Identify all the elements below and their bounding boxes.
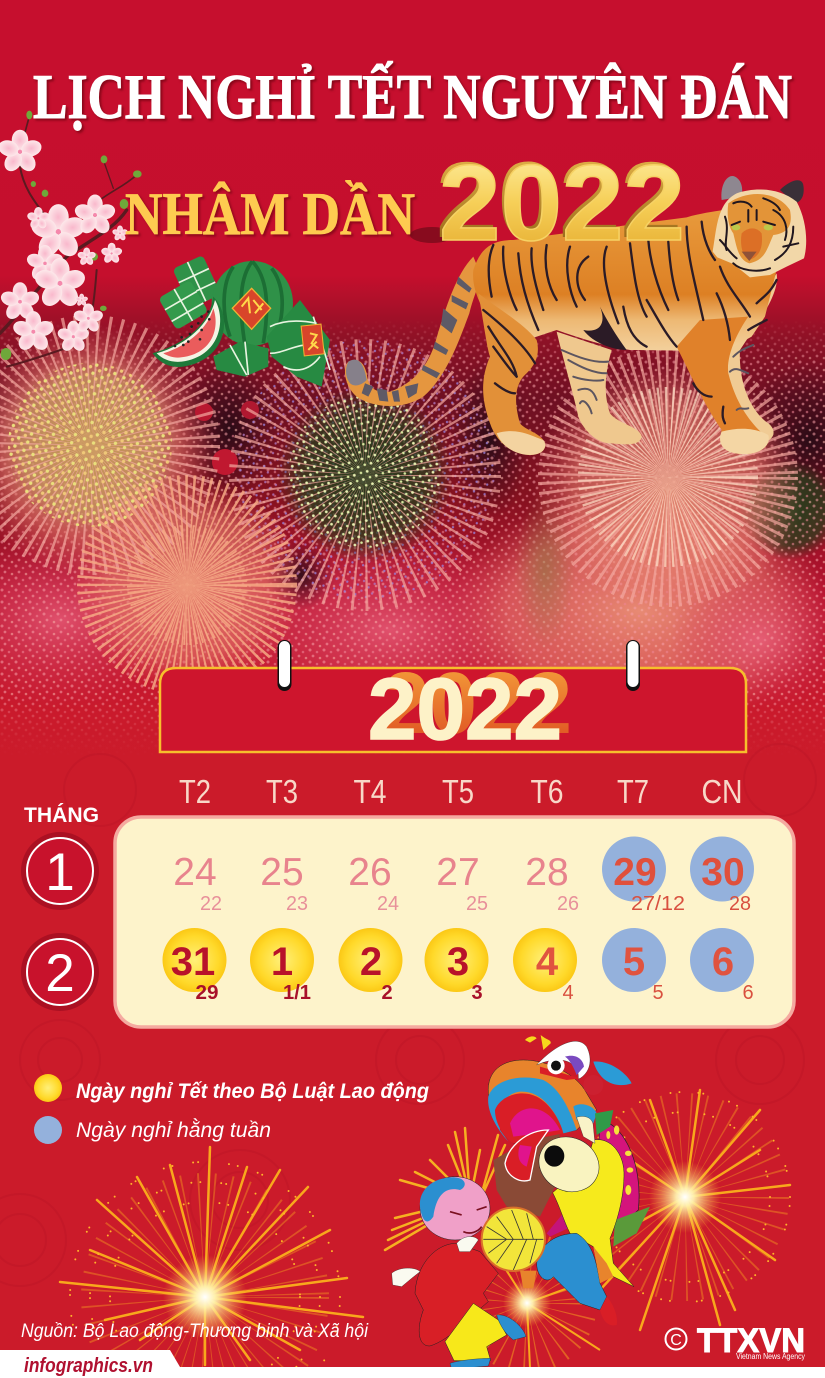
February lunar dates: 6 xyxy=(742,982,754,1004)
January dates row xyxy=(173,851,745,894)
January dates row: 30 xyxy=(701,851,745,894)
tiger head xyxy=(713,176,806,277)
illustration: peach blossom branch xyxy=(0,111,142,367)
heading: gold 2022: 2022 xyxy=(436,139,682,260)
February dates row xyxy=(171,940,734,984)
weekday headers: T6 xyxy=(530,773,564,810)
month badge 2 xyxy=(21,933,99,1011)
January dates row: 25 xyxy=(260,851,304,894)
weekday headers: T2 xyxy=(179,773,211,810)
tiger stripes xyxy=(483,222,777,423)
January dates row: 29 xyxy=(613,851,657,894)
heading: Nham Dan: NHÂM DẦN xyxy=(125,181,415,247)
legend: Tet holiday: Ngày nghỉ Tết theo Bộ Luật Lao động xyxy=(76,1080,429,1103)
tiger leg stripes xyxy=(562,345,753,413)
January lunar dates: 26 xyxy=(557,893,579,915)
January lunar dates: 22 xyxy=(200,893,222,915)
lion body scales xyxy=(547,1120,650,1247)
January dates row: 24 xyxy=(173,851,217,894)
February dates row: 2 xyxy=(360,940,382,984)
weekday headers xyxy=(179,773,742,810)
illustration: lion dance boys xyxy=(392,1035,650,1369)
binding ring left xyxy=(278,640,292,691)
palm fan xyxy=(482,1208,545,1288)
January lunar dates: 27/12 xyxy=(631,893,685,915)
source line: Nguồn: Bộ Lao động-Thương binh và Xã hội xyxy=(21,1321,369,1342)
binding ring right xyxy=(626,640,640,691)
day markers: weekly holidays xyxy=(602,836,754,992)
firework: bottom left xyxy=(60,1147,363,1378)
legend: Tet holiday xyxy=(34,1074,429,1103)
month label: THÁNG xyxy=(24,804,99,827)
tiger tail xyxy=(345,257,482,406)
footer strip: infographics.vn xyxy=(24,1355,153,1377)
calendar year: 2022 xyxy=(368,661,562,758)
month badge 1: 1 xyxy=(45,843,75,902)
tiger body xyxy=(473,210,777,351)
calendar header plate xyxy=(160,640,746,758)
February lunar dates: 29 xyxy=(196,982,218,1004)
tiger far front leg xyxy=(717,273,777,443)
firework: fan behind boys xyxy=(385,1128,505,1250)
January lunar dates xyxy=(200,893,751,915)
weekday headers: CN xyxy=(702,773,742,810)
February dates row: 5 xyxy=(623,940,645,984)
illustration: tiger xyxy=(345,176,806,455)
fireworks background xyxy=(0,316,825,743)
February lunar dates: 3 xyxy=(471,982,483,1004)
month badge 1 xyxy=(21,832,99,910)
weekday headers: T7 xyxy=(617,773,649,810)
tiger near front leg xyxy=(677,317,768,454)
January lunar dates: 24 xyxy=(377,893,399,915)
tiger far hind leg xyxy=(557,332,642,444)
firework: bottom right xyxy=(580,1090,790,1330)
January lunar dates: 28 xyxy=(729,893,751,915)
February lunar dates: 2 xyxy=(381,982,393,1004)
January dates row: 28 xyxy=(525,851,569,894)
January lunar dates: 23 xyxy=(286,893,308,915)
lion rear body xyxy=(493,1130,560,1217)
month badge 2: 2 xyxy=(45,944,75,1003)
lion head xyxy=(488,1035,632,1181)
heading: gold 2022: 2022 xyxy=(439,142,685,263)
legend: weekly holiday xyxy=(34,1116,271,1144)
February lunar dates xyxy=(196,982,754,1004)
February dates row: 31 xyxy=(171,940,215,984)
tiger near hind leg xyxy=(478,293,545,455)
weekday headers: T5 xyxy=(442,773,474,810)
calendar panel xyxy=(115,817,794,1027)
decorative swirl pattern xyxy=(0,744,816,1286)
legend: weekly holiday: Ngày nghỉ hằng tuần xyxy=(76,1119,271,1142)
February lunar dates: 4 xyxy=(562,982,574,1004)
yellow boy xyxy=(530,1110,634,1325)
February dates row: 1 xyxy=(271,940,293,984)
January lunar dates: 25 xyxy=(466,893,488,915)
footer strip xyxy=(0,1350,825,1378)
weekday headers: T3 xyxy=(266,773,298,810)
weekday headers: T4 xyxy=(354,773,386,810)
February lunar dates: 1/1 xyxy=(283,982,311,1004)
copyright TTXVN logo: TTXVN xyxy=(697,1322,805,1360)
February dates row: 4 xyxy=(536,940,559,984)
illustration: watermelon and banh chung xyxy=(153,255,330,387)
copyright TTXVN logo: C xyxy=(670,1332,682,1349)
calendar year: 2022 xyxy=(382,655,572,752)
January dates row: 26 xyxy=(348,851,392,894)
January dates row: 27 xyxy=(436,851,480,894)
February lunar dates: 5 xyxy=(652,982,664,1004)
day markers: Tet holidays xyxy=(162,928,577,992)
February dates row: 3 xyxy=(447,940,469,984)
copyright TTXVN logo: Vietnam News Agency xyxy=(736,1352,805,1361)
February dates row: 6 xyxy=(712,940,734,984)
firework: small centre xyxy=(492,1260,600,1368)
pink boy xyxy=(392,1177,526,1369)
